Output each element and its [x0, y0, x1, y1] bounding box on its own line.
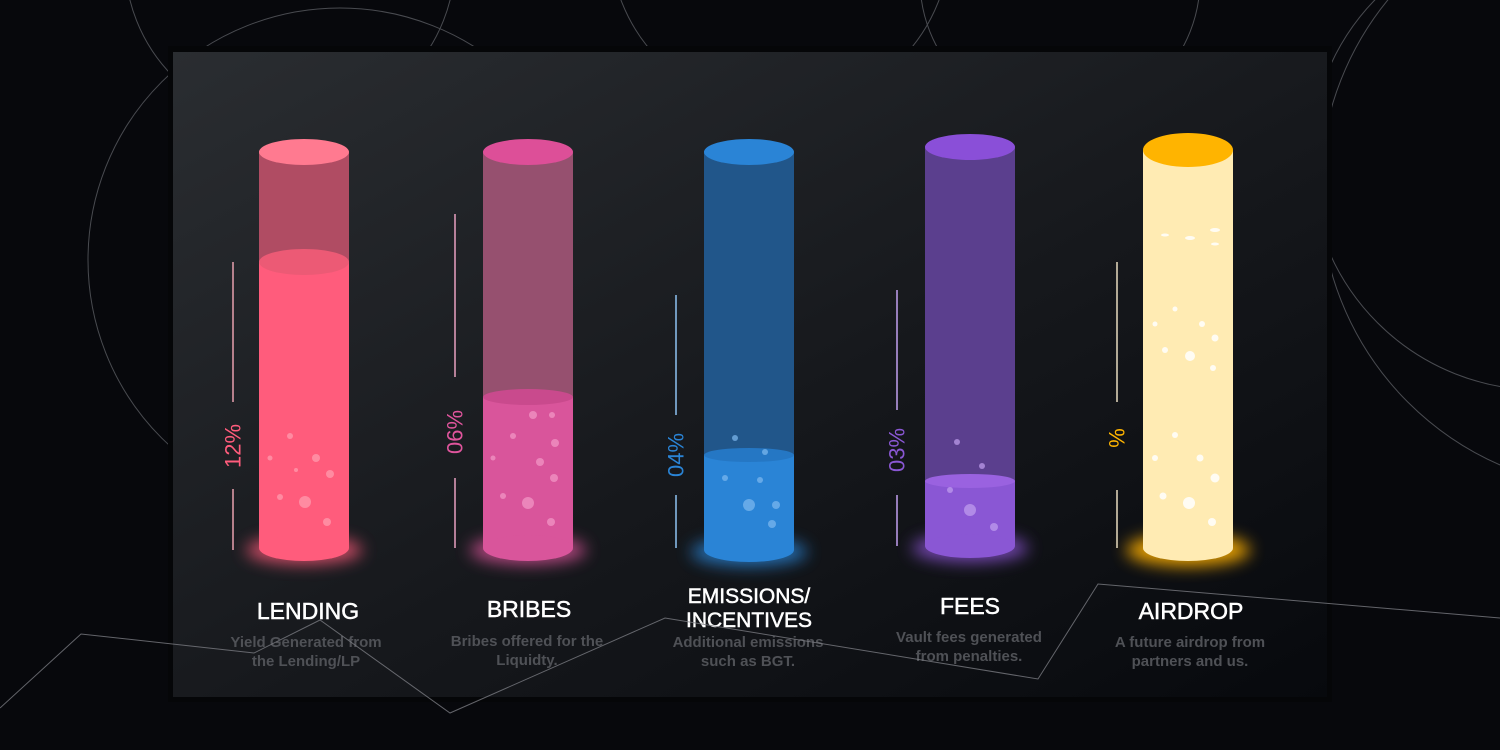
label: 12%: 12% — [220, 424, 246, 468]
desc: bribes: Bribes offered for the — [451, 633, 603, 650]
titles and descriptions — [230, 585, 1265, 670]
label: 06%: 06% — [442, 410, 468, 454]
desc: airdrop: A future airdrop from — [1115, 634, 1265, 651]
decorative zigzag line — [0, 584, 1500, 713]
title: emissions: EMISSIONS/ — [688, 585, 810, 608]
desc: emissions: such as BGT. — [701, 653, 795, 670]
label: %: % — [1104, 428, 1130, 448]
desc: bribes: Liquidty. — [496, 652, 558, 669]
label: 03%: 03% — [884, 428, 910, 472]
background decorative arcs — [88, 0, 1500, 512]
cylinder: bribes — [470, 139, 586, 564]
cylinder: emissions — [691, 139, 807, 566]
desc: fees: Vault fees generated — [896, 629, 1042, 646]
desc: fees: from penalties. — [916, 648, 1022, 665]
title: airdrop: AIRDROP — [1139, 598, 1243, 624]
cylinder: fees — [912, 134, 1028, 562]
title: lending: LENDING — [257, 598, 359, 624]
desc: lending: Yield Generated from — [230, 634, 382, 651]
label: 04%: 04% — [664, 433, 688, 477]
title: bribes: BRIBES — [487, 596, 571, 622]
desc: emissions: Additional emissions — [673, 634, 823, 651]
title: emissions: INCENTIVES — [686, 609, 812, 632]
desc: airdrop: partners and us. — [1132, 653, 1248, 670]
title: fees: FEES — [940, 593, 1000, 619]
cylinder: airdrop — [1126, 133, 1250, 566]
desc: lending: the Lending/LP — [252, 653, 360, 670]
panel — [168, 46, 1332, 702]
cylinder: lending — [246, 139, 362, 564]
